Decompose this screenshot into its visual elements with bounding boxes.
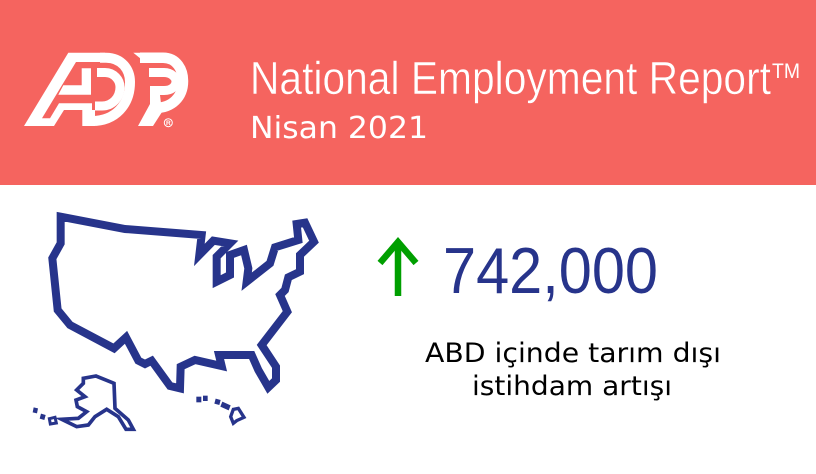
contiguous states outline <box>52 217 314 388</box>
logo: ADP <box>24 53 183 127</box>
description: ABD içinde tarım dışı <box>425 338 721 369</box>
registered mark: R <box>166 120 171 127</box>
up arrow <box>380 241 416 296</box>
map: United States <box>33 217 314 429</box>
Hawaii <box>196 396 244 423</box>
subtitle: Nisan 2021 <box>250 111 428 146</box>
trademark: TM <box>772 60 800 83</box>
registered mark <box>164 119 172 127</box>
headline number: 742,000 <box>443 234 658 307</box>
description: istihdam artışı <box>472 371 672 402</box>
description <box>425 338 721 402</box>
Alaska <box>62 376 133 429</box>
Aleutian islands <box>33 407 56 424</box>
header banner <box>0 0 816 185</box>
